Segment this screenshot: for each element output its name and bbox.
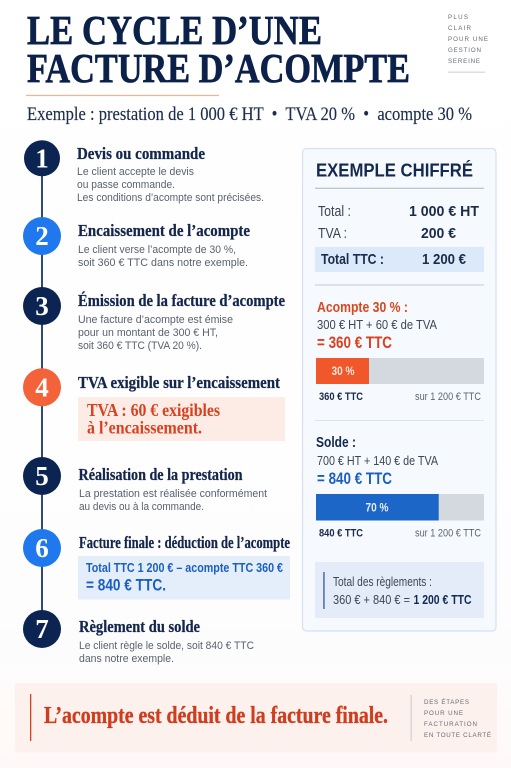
step 1: [24, 140, 264, 204]
step 1: ou passe commande.: [77, 179, 175, 191]
panel: exemple chiffré: [302, 148, 496, 631]
step 3: Une facture d’acompte est émise: [78, 314, 233, 326]
step 1: Les conditions d’acompte sont précisées.: [77, 192, 264, 204]
title: FACTURE D’ACOMPTE: [27, 45, 410, 91]
step 2: Encaissement de l’acompte: [78, 221, 250, 240]
step 7: Le client règle le solde, soit 840 € TTC: [79, 640, 254, 652]
progress bar: 30 %: 30 %: [332, 366, 354, 378]
footer banner: [15, 683, 497, 752]
tagline: top right: [448, 14, 488, 72]
totals table: Total TTC :: [321, 251, 384, 268]
step 7: [23, 610, 254, 665]
step 7: dans notre exemple.: [79, 653, 174, 665]
step 2: soit 360 € TTC dans notre exemple.: [78, 257, 248, 269]
callout: calcul: [78, 556, 290, 600]
step 5: [23, 457, 267, 513]
totals table: TVA :: [318, 225, 347, 242]
totals table: Total :: [318, 203, 351, 220]
step 3: [23, 287, 285, 352]
callout: TVA: [78, 397, 285, 441]
footer tagline: FACTURATION: [424, 721, 477, 728]
step 3: Émission de la facture d’acompte: [78, 291, 285, 310]
totals table: 1 200 €: [422, 251, 467, 268]
tagline: top right: SEREINE: [448, 58, 480, 65]
title: [27, 7, 410, 91]
step 7: 7: [35, 614, 49, 644]
step 6: 6: [35, 533, 49, 563]
step 1: Devis ou commande: [77, 144, 205, 163]
step 6: [23, 529, 290, 600]
step 3: pour un montant de 300 € HT,: [78, 327, 218, 339]
section: solde: [316, 434, 484, 540]
section: acompte: Acompte 30 % :: [317, 300, 408, 316]
step 4: [23, 368, 285, 441]
footer tagline: EN TOUTE CLARTÉ: [424, 732, 491, 739]
step 7: Règlement du solde: [79, 617, 200, 636]
callout: TVA: à l’encaissement.: [87, 418, 202, 438]
callout: calcul: Total TTC 1 200 € – acompte TTC 360 €: [86, 560, 283, 575]
total des règlements: 360 € + 840 € =: [333, 593, 410, 607]
section: solde: 700 € HT + 140 € de TVA: [317, 454, 439, 468]
total des règlements: Total des règlements :: [333, 575, 432, 589]
progress bar: 30 %: [316, 358, 484, 384]
section: solde: = 840 € TTC: [317, 469, 392, 488]
step 1: Le client accepte le devis: [77, 166, 194, 178]
tagline: top right: GESTION: [448, 47, 481, 54]
step 5: Réalisation de la prestation: [78, 465, 242, 484]
step 5: La prestation est réalisée conformément: [79, 488, 267, 500]
tagline: top right: PLUS: [448, 14, 468, 21]
totals table: 200 €: [421, 225, 457, 242]
footer message: L’acompte est déduit de la facture finale.: [44, 703, 388, 729]
step 1: 1: [35, 143, 49, 173]
footer tagline: [424, 699, 491, 739]
section: acompte: 360 € TTC: [319, 391, 363, 403]
step 6: Facture finale : déduction de l’acompte: [79, 533, 290, 552]
step 2: [23, 217, 250, 269]
step 2: 2: [35, 221, 49, 251]
section: acompte: = 360 € TTC: [317, 333, 392, 352]
step 3: soit 360 € TTC (TVA 20 %).: [78, 340, 202, 352]
title: LE CYCLE D’UNE: [27, 7, 322, 53]
totals table: 1 000 € HT: [409, 203, 479, 220]
section: acompte: sur 1 200 € TTC: [415, 391, 481, 403]
timeline: [23, 140, 290, 665]
step 2: Le client verse l’acompte de 30 %,: [78, 244, 236, 256]
totals table: [315, 203, 484, 272]
section: solde: sur 1 200 € TTC: [415, 528, 481, 540]
tagline: top right: POUR UNE: [448, 36, 488, 43]
callout: TVA: TVA : 60 € exigibles: [87, 400, 220, 420]
callout: calcul: = 840 € TTC.: [86, 576, 166, 594]
tagline: top right: CLAIR: [448, 25, 472, 32]
step 5: au devis ou à la commande.: [79, 501, 204, 513]
total des règlements: 1 200 € TTC: [414, 593, 472, 607]
step 5: 5: [35, 461, 49, 491]
step 3: 3: [35, 291, 49, 321]
progress bar: 70 %: 70 %: [366, 502, 388, 514]
footer tagline: DES ÉTAPES: [424, 699, 469, 706]
section: solde: Solde :: [316, 434, 356, 451]
section: solde: 840 € TTC: [319, 528, 363, 540]
progress bar: 70 %: [316, 494, 484, 520]
step 4: TVA exigible sur l’encaissement: [78, 373, 280, 392]
panel heading: EXEMPLE CHIFFRÉ: [316, 160, 473, 180]
section: acompte: [316, 300, 484, 403]
footer tagline: POUR UNE: [424, 710, 463, 717]
section: acompte: 300 € HT + 60 € de TVA: [317, 318, 438, 332]
step 4: 4: [35, 372, 49, 402]
total des règlements: [315, 562, 484, 618]
